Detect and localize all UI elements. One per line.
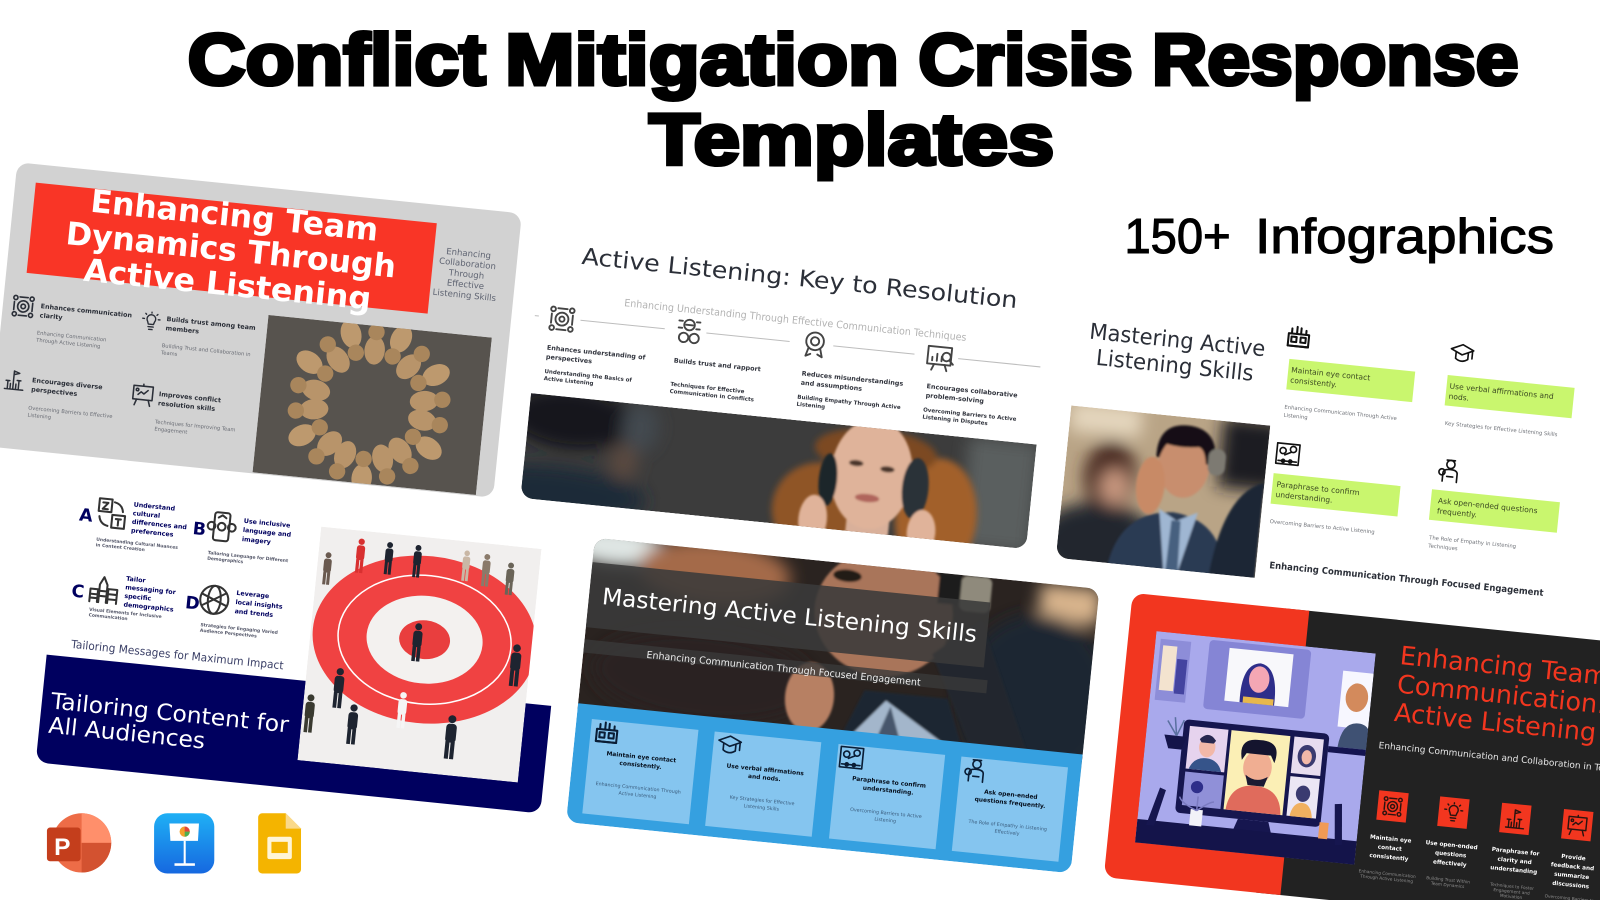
dark title overlay [586, 562, 990, 668]
item D: and trends [234, 608, 274, 619]
desk and decor [1135, 819, 1357, 866]
step 4 text: Overcoming Barriers to Active [923, 407, 1017, 423]
item D: Leverage [236, 590, 270, 600]
step 4 text [922, 382, 1019, 430]
slide subheading: Enhancing Understanding Through Effective Communication Techniques [624, 298, 967, 344]
step 1: consistently [1369, 853, 1409, 863]
blue band [566, 703, 1083, 873]
photo: target with people [297, 527, 547, 783]
card 2: and nods. [748, 774, 781, 783]
card: open-ended questions: frequently. [1437, 506, 1477, 519]
step 2 text: Communication in Conflicts [669, 389, 755, 403]
card: open-ended questions: Techniques [1427, 543, 1458, 552]
red title banner [27, 183, 437, 314]
illustration: video call [1135, 631, 1379, 866]
step 4: Provide [1561, 854, 1586, 862]
title: Mitigation [505, 20, 899, 101]
step 1 text: Active Listening [543, 376, 594, 387]
slide heading [1393, 641, 1600, 749]
red side panel [1104, 593, 1309, 895]
photo: man with headphones [1057, 406, 1270, 578]
icon: PowerPoint [47, 813, 111, 872]
step 4 [1544, 808, 1600, 900]
item A: Understanding Cultural Nuances [96, 537, 178, 551]
slide heading: Mastering Active Listening Skills [601, 584, 978, 648]
card 1: Maintain eye contact [606, 751, 677, 764]
step 2 [1421, 795, 1482, 891]
item: diverse perspectives: perspectives [31, 385, 78, 398]
footer line: Enhancing Communication Through Focused Engagement [1269, 560, 1545, 599]
item D: D [184, 593, 201, 615]
side caption: Effective [446, 278, 484, 292]
step 4: feedback and [1551, 862, 1594, 872]
card: maintain eye contact: Enhancing Communication Through Active [1284, 405, 1397, 422]
item B: Use inclusive [243, 518, 291, 530]
side caption: Listening Skills [432, 288, 497, 304]
item C: Visual Elements for Inclusive [89, 607, 162, 620]
item: builds trust: members [165, 324, 200, 336]
card: maintain eye contact: Maintain eye contact [1291, 365, 1371, 382]
slide heading: Active Listening: Key to Resolution [580, 244, 1019, 314]
card: paraphrase: understanding. [1275, 490, 1333, 505]
card 4: Ask open-ended [984, 790, 1038, 801]
timeline icons and connectors [533, 304, 1042, 381]
card: maintain eye contact [1280, 326, 1419, 432]
step 4 text: Listening in Disputes [922, 415, 989, 427]
card 3: understanding. [862, 786, 914, 797]
item: communication clarity: Enhances communication [40, 302, 133, 319]
dark background [1256, 608, 1600, 900]
item C: specific [124, 593, 152, 603]
slide heading: Dynamics Through [64, 216, 398, 285]
title [188, 20, 1518, 180]
item A: preferences [131, 527, 174, 539]
navy band [36, 655, 551, 813]
side caption: Collaboration [439, 257, 496, 272]
slide heading: Active Listening [1393, 698, 1598, 748]
card 2: Listening Skills [743, 803, 780, 813]
item B: B [192, 519, 207, 540]
card 4: The Role of Empathy in Listening [967, 819, 1047, 833]
item B: Demographics [207, 556, 244, 565]
step 3: Paraphrase for [1491, 847, 1540, 858]
step 1: contact [1377, 845, 1402, 853]
item: conflict resolution: Engagement [154, 427, 188, 436]
step 4: discussions [1552, 881, 1590, 890]
subtitle: 150+ Infographics [1124, 210, 1554, 264]
item C [69, 570, 178, 627]
item A: cultural [132, 510, 160, 520]
card: maintain eye contact: Listening [1283, 413, 1308, 421]
panel: Enhancing Team Dynamics (grey slide) [0, 158, 522, 506]
card: open-ended questions: The Role of Empathy in Listening [1428, 535, 1516, 550]
item B: imagery [242, 536, 271, 546]
side caption: Through [447, 268, 485, 282]
slide heading: Mastering Active [1088, 320, 1266, 362]
card: paraphrase: Overcoming Barriers to Active Listening [1269, 519, 1375, 536]
card: paraphrase: Paraphrase to confirm [1276, 480, 1360, 497]
card: verbal affirmations: nods. [1448, 392, 1470, 403]
item: communication clarity: Through Active Listening [35, 338, 101, 350]
step 2: effectively [1433, 859, 1467, 869]
card 2: Key Strategies for Effective [729, 795, 795, 807]
subtitle: 150+ Infographics: 150+ [1124, 210, 1231, 264]
item C: Communication [88, 612, 128, 622]
card 3: Listening [874, 817, 896, 825]
card 1: Enhancing Communication Through [595, 781, 681, 796]
step 4: summarize [1554, 872, 1589, 881]
icon: PowerPoint: P [54, 834, 70, 861]
card 4: Effectively [994, 829, 1020, 837]
band heading [46, 688, 291, 763]
panel: Tailoring Content for All Audiences [36, 494, 567, 813]
item: conflict resolution: Techniques for Improving Team [154, 419, 236, 434]
slide heading: Enhancing Team [89, 184, 380, 249]
step 2 text [669, 356, 761, 404]
step 4 text: Encourages collaborative [926, 382, 1019, 399]
panel: Enhancing Team Communication (red and dark) [1104, 593, 1600, 900]
step 2: Team Dynamics [1430, 881, 1465, 890]
slide heading: Listening Skills [1095, 346, 1255, 387]
panel: Mastering Active Listening Skills (blue cards) [567, 538, 1098, 872]
panel: Mastering Active Listening Skills (green boxes) [1057, 322, 1575, 596]
item: builds trust: Building Trust and Collaboration in [161, 343, 251, 358]
item: communication clarity: Enhancing Communication [37, 330, 107, 344]
title: Response [1152, 20, 1518, 101]
item: builds trust: Builds trust among team [166, 315, 256, 332]
step 3 text: Reduces misunderstandings [801, 370, 904, 388]
step 2: questions [1435, 850, 1467, 860]
step 3: understanding [1490, 865, 1537, 876]
title: Crisis [918, 20, 1133, 101]
band heading: Tailoring Content for [49, 688, 291, 738]
card 3: Paraphrase to confirm [852, 776, 926, 790]
card: verbal affirmations: Key Strategies for Effective Listening Skills [1444, 421, 1558, 438]
step 1 text: perspectives [546, 353, 593, 365]
item C: messaging for [125, 584, 177, 596]
item: conflict resolution [130, 383, 239, 441]
step 2: Use open-ended [1425, 840, 1478, 851]
tagline: Tailoring Messages for Maximum Impact [70, 638, 285, 672]
side caption: Enhancing [446, 247, 491, 262]
item B: language and [242, 527, 291, 539]
card: open-ended questions [1426, 459, 1563, 562]
card: open-ended questions: Ask open-ended questions [1438, 496, 1538, 515]
card 1: consistently. [619, 761, 662, 771]
step 3 [1487, 802, 1544, 900]
item A: A [78, 505, 94, 527]
photo: man with headphones close-up [577, 538, 1098, 782]
panel: Active Listening Key to Resolution [522, 248, 1040, 548]
side caption [432, 246, 501, 304]
subtitle: 150+ Infographics: Infographics [1255, 210, 1554, 264]
monitor [1175, 720, 1330, 833]
item: conflict resolution: resolution skills [158, 399, 216, 413]
step 1 [1358, 789, 1424, 885]
item A [76, 496, 189, 557]
icon: Google Slides [258, 813, 301, 873]
card 4 [952, 757, 1068, 862]
photo: wooden pegs in a circle [252, 309, 492, 504]
band heading: All Audiences [47, 713, 206, 755]
item A: differences and [132, 519, 187, 531]
step 3 text: Listening [796, 402, 825, 411]
item: diverse perspectives: Overcoming Barriers to Effective [28, 406, 113, 420]
dark subtitle overlay [583, 639, 988, 693]
item: builds trust: Teams [160, 350, 178, 358]
slide subheading: Enhancing Communication Through Focused Engagement [646, 650, 921, 689]
item D: Audience Perspectives [200, 628, 257, 639]
icon: Keynote [154, 813, 214, 873]
step 2 text: Builds trust and rapport [673, 357, 761, 373]
step 3: clarity and [1497, 857, 1532, 866]
title: Conflict [188, 20, 486, 101]
item: builds trust [139, 311, 256, 366]
step 1 text [543, 344, 646, 392]
item D: local insights [235, 599, 283, 611]
item C: demographics [123, 602, 174, 614]
step 3: Techniques to Foster [1489, 881, 1534, 892]
step 1 text: Enhances understanding of [547, 344, 646, 362]
item: conflict resolution: Improves conflict [159, 390, 221, 404]
item C: Tailor [126, 576, 147, 585]
slide heading [1086, 320, 1266, 388]
card: verbal affirmations [1442, 343, 1578, 440]
step 2: Building Trust Within [1426, 875, 1471, 886]
card 3: Overcoming Barriers to Active [850, 807, 922, 820]
step 3 text: Building Empathy Through Active [797, 395, 901, 411]
card: verbal affirmations: Use verbal affirmations and [1449, 382, 1554, 401]
card: maintain eye contact: consistently. [1290, 376, 1337, 389]
title: Templates [649, 99, 1054, 180]
item B: Tailoring Language for Different [207, 550, 289, 564]
item A: Understand [133, 502, 175, 513]
step 1: Enhancing Communication [1358, 868, 1416, 880]
slide heading [61, 182, 401, 320]
step 3 text: and assumptions [800, 379, 863, 393]
item C: C [71, 582, 85, 603]
step 4 text: problem-solving [925, 391, 985, 405]
item D: Strategies for Engaging Varied [200, 622, 278, 636]
card: paraphrase [1268, 443, 1404, 538]
item: communication clarity: clarity [39, 311, 64, 322]
item: communication clarity [9, 295, 133, 353]
step 3: Engagement and [1493, 887, 1530, 897]
item A: in Content Creation [95, 542, 145, 553]
item: diverse perspectives: Listening [27, 413, 51, 421]
card 1: Active Listening [618, 791, 657, 800]
step 1: Through Active Listening [1359, 873, 1414, 885]
slide heading: Active Listening [82, 253, 373, 318]
step 3 text [796, 369, 904, 418]
step 1 text: Understanding the Basics of [544, 369, 633, 384]
card 1 [582, 719, 698, 824]
card 3 [829, 744, 945, 849]
item: diverse perspectives: Encourages diverse [32, 376, 104, 391]
step 1: Maintain eye [1370, 835, 1412, 845]
card 4: questions frequently. [974, 797, 1046, 810]
item D [182, 583, 284, 642]
item: diverse perspectives [2, 370, 116, 427]
step 2 text: Techniques for Effective [670, 382, 745, 395]
photo: woman with headphones [522, 393, 1036, 548]
card 2 [705, 731, 821, 837]
item B [190, 510, 293, 570]
card 2: Use verbal affirmations [726, 764, 805, 777]
